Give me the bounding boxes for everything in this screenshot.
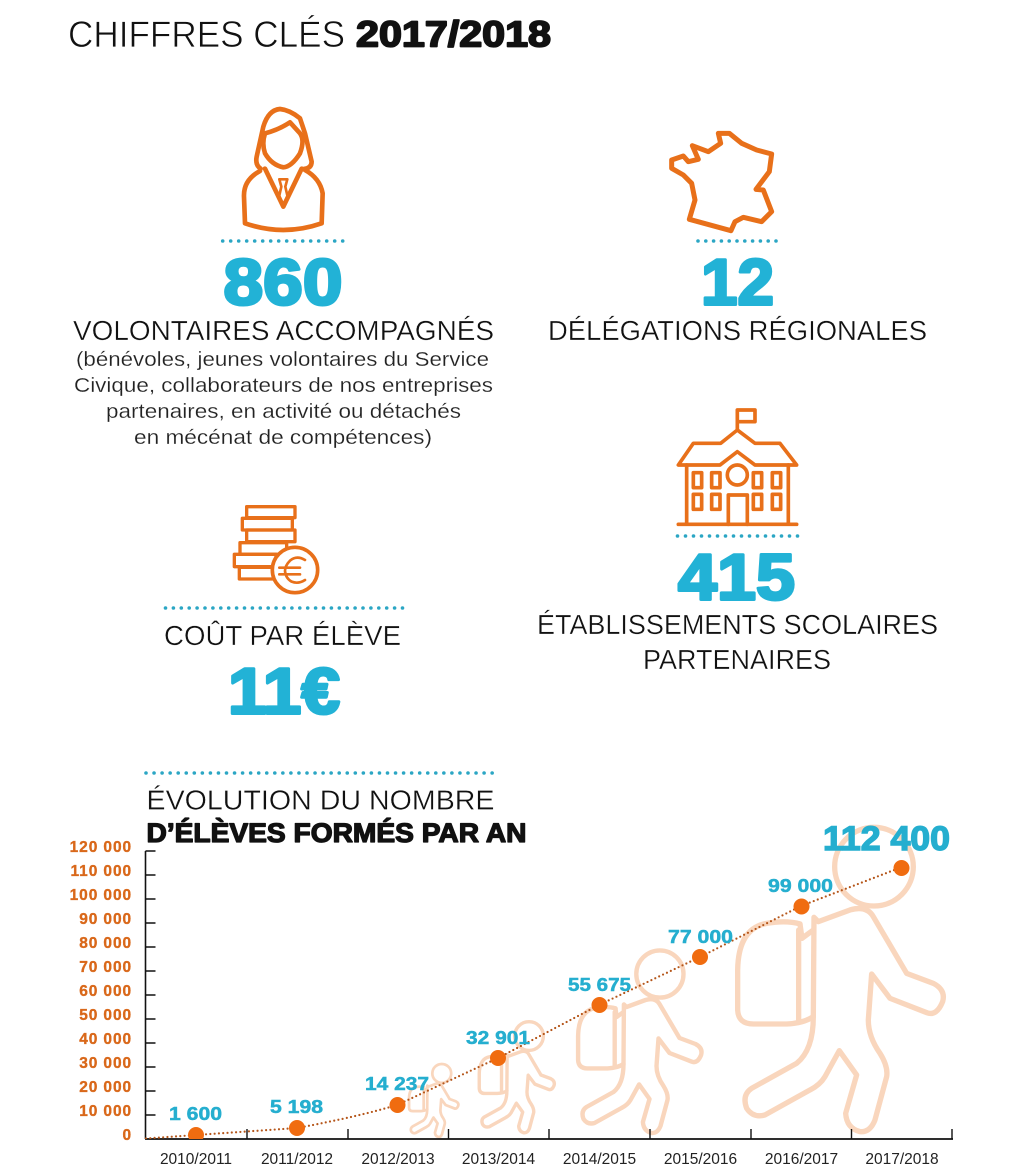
y axis: 110 000 [71,863,132,880]
y axis: 80 000 [79,935,132,952]
panel: coût par élève [164,507,403,728]
data labels: 99 000 [768,875,833,896]
text block: volontaires details: en mécénat de compétences) [134,426,432,449]
icon: volunteer person [244,109,323,230]
data labels: 1 600 [169,1103,222,1124]
y axis: 0 [122,1127,132,1144]
y axis: 70 000 [79,959,132,976]
text block: volontaires details: (bénévoles, jeunes volontaires du Service [76,348,489,371]
x axis: 2011/2012 [261,1151,333,1168]
heading: délégations régionales: DÉLÉGATIONS RÉGIONALES [548,315,927,346]
heading: évolution du nombre d'élèves formés par an [146,784,526,848]
x axis: 2012/2013 [361,1151,435,1168]
heading: coût par élève: COÛT PAR ÉLÈVE [164,620,401,651]
title: 2017/2018 [356,14,551,54]
y axis: 20 000 [79,1079,132,1096]
panel: délégations [548,133,927,346]
heading: établissements scolaires partenaires: ÉTABLISSEMENTS SCOLAIRES [537,609,938,640]
heading: établissements scolaires partenaires [537,609,938,675]
y axis: 120 000 [70,839,132,856]
text block: volontaires details [74,348,493,449]
data labels: 32 901 [466,1027,530,1048]
y axis: 40 000 [79,1031,132,1048]
y axis: 30 000 [79,1055,132,1072]
heading: établissements scolaires partenaires: PARTENAIRES [643,644,831,675]
panel: établissements [537,410,938,675]
icon: map of France [672,133,772,231]
illustration: walking children growing [409,827,943,1137]
x axis: 2013/2014 [462,1151,536,1168]
x axis: 2017/2018 [865,1151,939,1168]
title: CHIFFRES CLÉS [68,13,345,55]
data labels: 5 198 [270,1096,323,1117]
y axis: 90 000 [79,911,132,928]
heading: évolution du nombre d'élèves formés par an: D’ÉLÈVES FORMÉS PAR AN [146,818,526,848]
y axis: 50 000 [79,1007,132,1024]
x axis: 2010/2011 [160,1151,232,1168]
data labels: 112 400 [823,820,950,858]
text block: volontaires details: Civique, collaborateurs de nos entreprises [74,374,493,397]
x axis: 2016/2017 [765,1151,838,1168]
x axis: 2015/2016 [664,1151,737,1168]
y axis: 10 000 [79,1103,132,1120]
data labels: 55 675 [568,974,631,995]
line series: élèves formés [146,860,910,1143]
x axis [145,1129,953,1168]
icon: school [678,410,797,524]
data labels [169,820,950,1124]
title [68,13,551,55]
y axis: 100 000 [70,887,132,904]
number: 860: 860 [224,246,342,318]
icon: coins with euro [234,507,318,593]
number: 415: 415 [678,540,795,614]
panel: évolution chart [70,773,953,1168]
y axis: 60 000 [79,983,132,1000]
number: 12: 12 [701,246,774,318]
heading: volontaires accompagnés: VOLONTAIRES ACCOMPAGNÉS [73,315,494,346]
x axis: 2014/2015 [563,1151,636,1168]
y axis [70,839,156,1144]
text block: volontaires details: partenaires, en activité ou détachés [106,400,461,423]
panel: volontaires [73,109,494,449]
heading: évolution du nombre d'élèves formés par an: ÉVOLUTION DU NOMBRE [146,784,494,816]
data labels: 14 237 [365,1073,429,1094]
data labels: 77 000 [668,926,733,947]
number: 11€: 11€ [228,654,340,728]
